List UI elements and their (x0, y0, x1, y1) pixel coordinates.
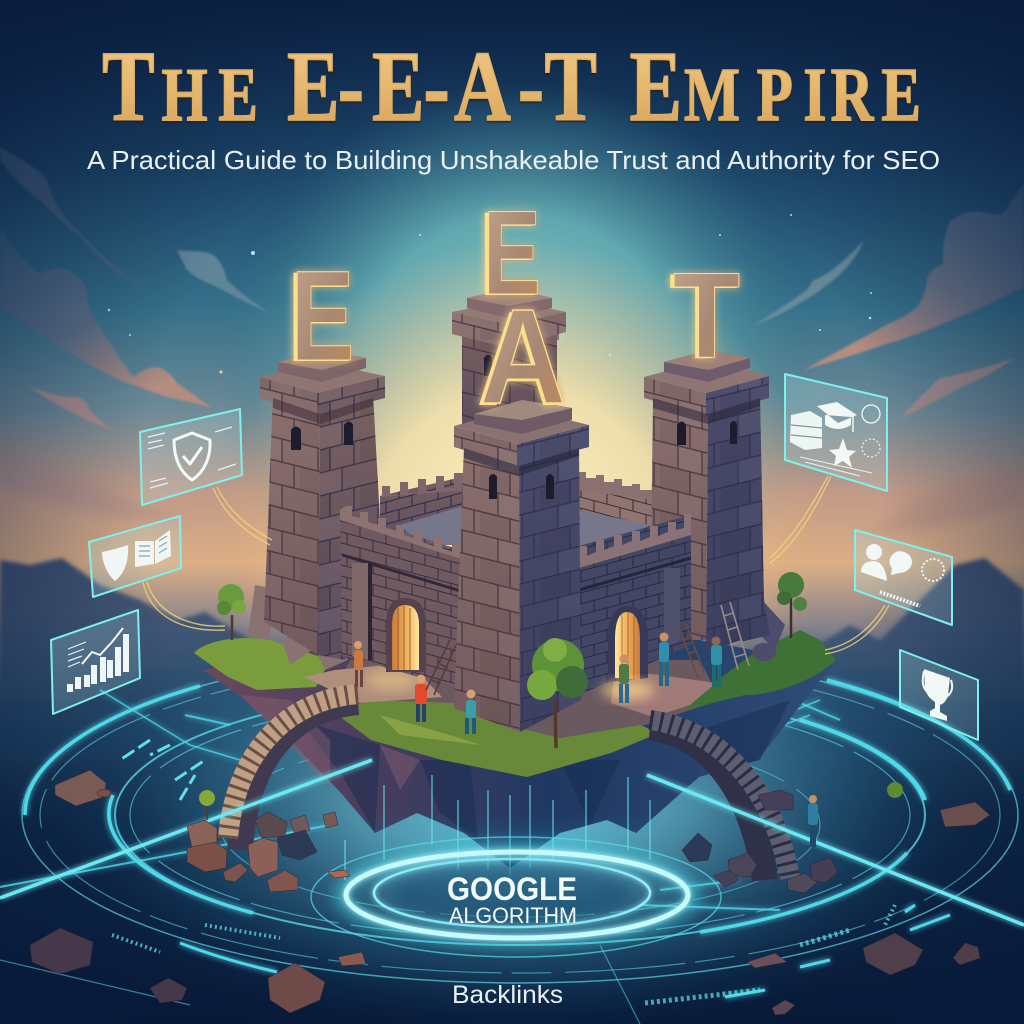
label: Backlinks: Backlinks (452, 981, 563, 1009)
left bridge (228, 694, 358, 850)
panel: community (855, 530, 952, 625)
letter E back: E (479, 187, 538, 321)
title: E (629, 30, 682, 142)
panel: growth chart (51, 610, 140, 714)
tree left (217, 584, 246, 640)
icon: books (790, 411, 822, 450)
icon: shield (102, 545, 128, 581)
back tower with letter E (452, 186, 566, 425)
left door (386, 598, 426, 672)
label: Google Algorithm: ALGORITHM (449, 903, 577, 928)
island grass top (194, 585, 836, 777)
clouds (0, 147, 1024, 535)
panel: education (785, 374, 887, 491)
right door (608, 606, 648, 682)
tree and workers (217, 572, 818, 847)
subtitle: A Practical Guide to Building Unshakeable Trust and Authority for SEO (87, 145, 940, 175)
letter E left: E (287, 246, 352, 389)
right tower with letter T (644, 247, 770, 650)
icon: shield check (174, 433, 210, 480)
title: HE (161, 52, 258, 137)
boulders (248, 585, 785, 670)
back walls (380, 472, 652, 550)
central front tower with letter A (454, 281, 589, 732)
label: Google Algorithm (447, 871, 577, 928)
icon: trophy (923, 669, 952, 721)
letter T: T (673, 247, 740, 383)
tree right (777, 572, 807, 638)
panel: trophy (900, 650, 978, 740)
letter E back: E (483, 186, 541, 320)
title: MPIRE (684, 52, 921, 137)
paved courtyard (304, 663, 442, 703)
label: Google Algorithm: GOOGLE (447, 871, 577, 907)
icon: person (861, 544, 887, 581)
title: E-E-A-T (287, 30, 597, 142)
small tree and bush on the floor (199, 782, 903, 820)
tree centre (527, 638, 588, 748)
left tower with letter E (260, 244, 385, 660)
letter A: A (476, 284, 564, 434)
bridges (228, 694, 790, 880)
floating rock underside (203, 640, 832, 868)
ladders (426, 602, 749, 695)
letter A: A (480, 281, 566, 432)
mountains (0, 558, 1024, 760)
title: T (102, 30, 155, 142)
connector arcs (143, 476, 889, 654)
beams and vertical light lines (0, 760, 1024, 925)
icon: graduation cap (817, 402, 857, 429)
icon: star (829, 438, 856, 468)
workers (354, 632, 818, 847)
front right wall with door (579, 514, 691, 700)
front left wall with door (340, 506, 464, 690)
stars (108, 214, 872, 374)
central algorithm ring (311, 837, 721, 957)
letter T: T (669, 248, 738, 384)
panel: shield and book (89, 516, 181, 597)
bar chart (67, 634, 129, 692)
right bridge (650, 720, 790, 880)
icon: open book (135, 530, 171, 567)
rubble and stones (30, 770, 990, 1015)
holographic rings (0, 647, 1018, 1024)
letter E left: E (291, 244, 354, 387)
panel: trust shield (140, 409, 242, 505)
icon: speech bubble (890, 551, 912, 575)
